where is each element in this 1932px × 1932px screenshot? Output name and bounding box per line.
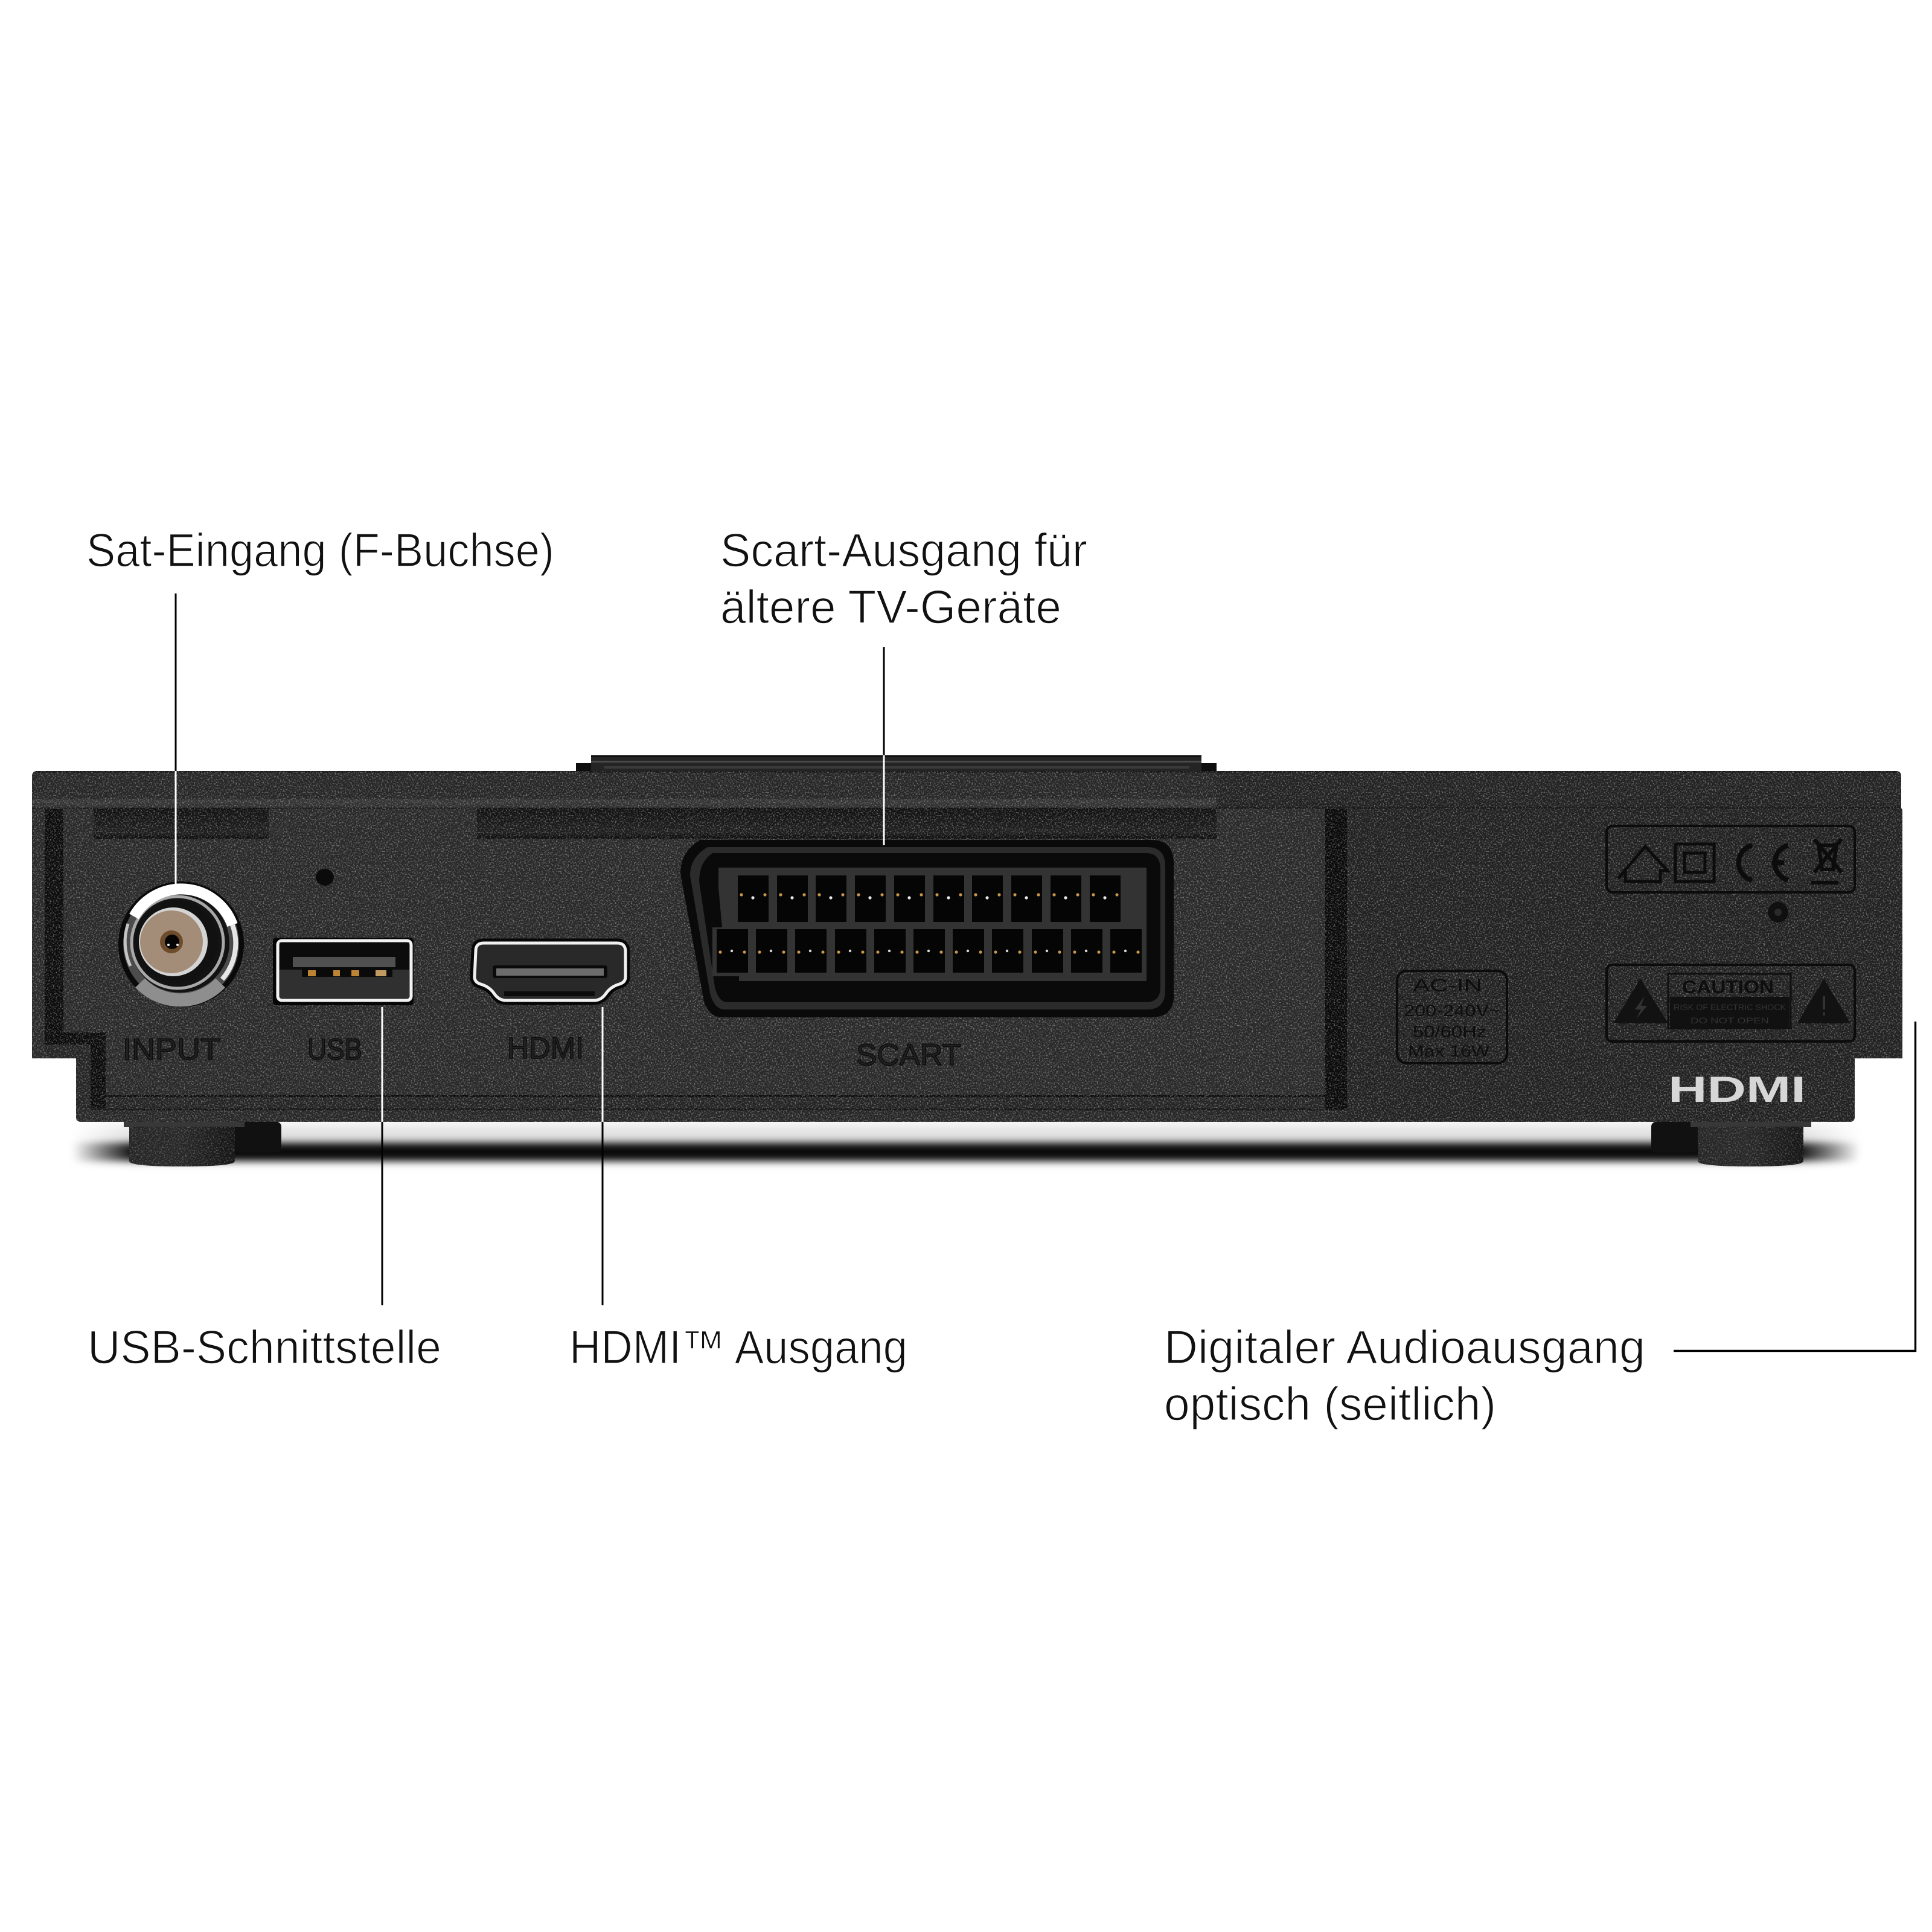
pins: top row xyxy=(738,875,1121,922)
icon: exclamation triangle xyxy=(1797,979,1850,1023)
connector insulator xyxy=(140,910,203,973)
caution heading: CAUTION xyxy=(1682,976,1774,997)
foot: right front xyxy=(1690,1122,1811,1166)
warning plate xyxy=(1670,997,1790,1028)
leader line: Digital audio xyxy=(1674,1022,1915,1351)
certification marks box xyxy=(1607,826,1855,892)
leader line: Scart xyxy=(883,647,885,845)
icon: satellite F connector xyxy=(118,881,244,1007)
engraved label: USB: USB xyxy=(307,1032,362,1066)
rear top piece xyxy=(576,755,1217,771)
logo: HDMI: HDMI xyxy=(1668,1069,1806,1110)
label: USB: USB-Schnittstelle xyxy=(88,1320,441,1374)
lid: left section xyxy=(32,771,1218,808)
engraved label: HDMI: HDMI xyxy=(507,1031,584,1065)
icon: HDMI port xyxy=(475,943,625,1000)
frequency text: 50/60Hz xyxy=(1413,1023,1486,1041)
AC-IN rating box xyxy=(1397,971,1507,1063)
right panel xyxy=(1850,809,1902,1122)
top left slot xyxy=(94,808,269,839)
bottom trim xyxy=(76,1095,1326,1122)
label: Scart-Ausgang xyxy=(720,523,1087,633)
icon: SCART socket xyxy=(680,840,1174,1017)
label: Scart-Ausgang: ältere TV-Geräte xyxy=(720,580,1061,633)
left wall channel xyxy=(45,809,106,1108)
receiver body xyxy=(32,771,1905,1124)
leader line: HDMI xyxy=(601,1007,604,1305)
caution frame xyxy=(1668,974,1791,1028)
grain texture xyxy=(32,771,1904,1124)
foot: right rear xyxy=(1651,1122,1698,1153)
AC-IN text: AC-IN xyxy=(1413,976,1482,996)
engraved label: INPUT: INPUT xyxy=(123,1032,220,1066)
divider gap xyxy=(1325,809,1347,1110)
label: Digital audio xyxy=(1164,1320,1645,1430)
foot: left rear xyxy=(235,1122,281,1153)
leader line: Sat-Eingang xyxy=(175,593,176,884)
label: Sat-Eingang: Sat-Eingang (F-Buchse) xyxy=(86,523,554,577)
CE mark xyxy=(1739,845,1788,880)
body base xyxy=(32,771,1904,1124)
label: Digital audio: Digitaler Audioausgang xyxy=(1164,1320,1645,1374)
foot: left front xyxy=(124,1122,245,1166)
icon: USB port xyxy=(273,938,414,1005)
recessed connector panel xyxy=(63,809,1325,1032)
warning text: RISK OF ELECTRIC SHOCK xyxy=(1674,1002,1786,1012)
pin block xyxy=(712,868,1147,981)
rubber feet xyxy=(121,1122,1811,1168)
label: Digital audio: optisch (seitlich) xyxy=(1164,1377,1496,1430)
icon: house xyxy=(1618,846,1668,881)
warning text xyxy=(1674,1002,1786,1025)
label: Scart-Ausgang: Scart-Ausgang für xyxy=(720,523,1087,577)
caution box xyxy=(1607,965,1855,1041)
floor shadow xyxy=(72,1128,1860,1161)
indicator hole xyxy=(316,869,334,886)
feet grain xyxy=(129,1127,1803,1166)
label: HDMI output: HDMI™ Ausgang xyxy=(569,1320,907,1374)
power text: Max 16W xyxy=(1408,1042,1490,1060)
pins: bottom row xyxy=(717,929,1142,973)
engraved label: SCART: SCART xyxy=(856,1038,961,1072)
icon: crossed bin xyxy=(1811,839,1841,883)
socket rim xyxy=(680,840,1174,1017)
lid: right section xyxy=(1217,771,1901,808)
leader line: USB xyxy=(382,1007,383,1305)
icon: double insulation xyxy=(1675,844,1714,881)
top long slot xyxy=(477,808,1217,839)
centre hole xyxy=(160,930,183,953)
icon: lightning triangle xyxy=(1613,979,1668,1023)
screw hole xyxy=(1768,902,1788,923)
warning text: DO NOT OPEN xyxy=(1690,1016,1769,1025)
voltage text: 200-240V~ xyxy=(1404,1002,1500,1020)
